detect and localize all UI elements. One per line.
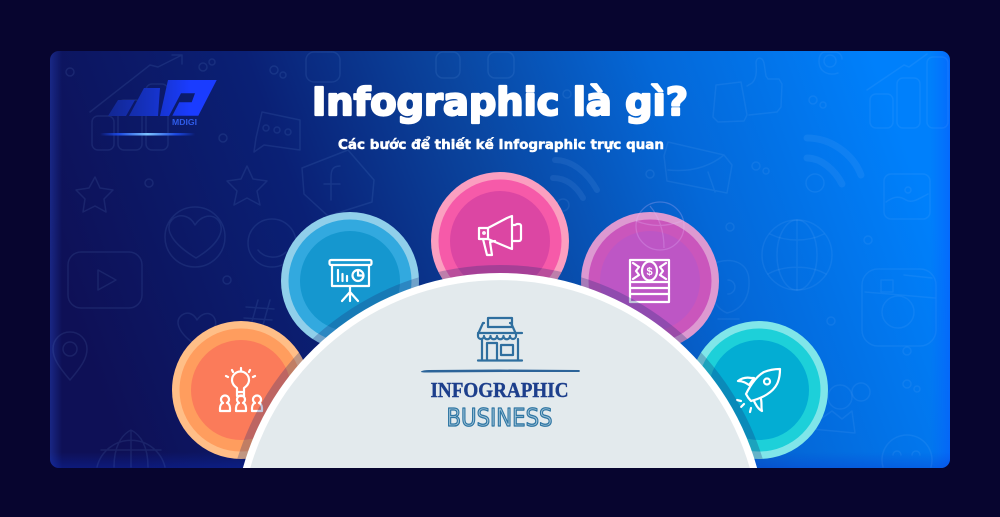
heading: BUSINESS: BUSINESS <box>446 403 552 432</box>
doodle: small bars <box>92 84 168 150</box>
shadow band cast on circles <box>235 265 765 468</box>
doodle: thumbs up <box>713 58 782 122</box>
circle: teal step <box>690 321 828 459</box>
logo mark <box>108 80 217 116</box>
circle: blue step <box>281 212 419 350</box>
doodle: picture <box>884 174 930 219</box>
icon: dollar sign: $ <box>646 266 653 278</box>
divider line <box>421 370 580 372</box>
doodle: globe <box>762 220 832 290</box>
circle: pink step <box>431 172 569 280</box>
doodle: person <box>812 383 870 433</box>
doodle: heart <box>165 207 225 267</box>
circle: orange step <box>172 321 310 459</box>
icon: storefront <box>478 318 522 360</box>
circle: purple step <box>581 202 719 350</box>
doodle: heart lower <box>178 313 216 345</box>
doodle: dribbble ball <box>636 217 684 265</box>
panel: blue gradient background <box>50 51 950 468</box>
doodle: rising arrow <box>90 55 182 112</box>
doodle: at sign <box>819 52 842 74</box>
doodle: play button <box>68 252 142 308</box>
doodle: hash <box>244 300 274 325</box>
doodle: top center icons <box>306 52 597 211</box>
doodle: smiley <box>882 435 932 467</box>
icon: rocket <box>737 369 780 412</box>
doodle: facebook <box>302 150 374 216</box>
doodle over purple <box>636 202 684 250</box>
heading: INFOGRAPHIC: INFOGRAPHIC <box>430 378 568 402</box>
subtitle: Các bước để thiết kế Infographic trực quan <box>338 136 664 153</box>
doodle icons pattern <box>53 52 948 467</box>
doodle: map pin <box>53 332 87 380</box>
logo: MDIGI <box>100 80 217 136</box>
doodle: lower left globe <box>97 430 165 467</box>
icon: presentation board <box>330 260 372 301</box>
doodle: bar chart <box>867 54 948 128</box>
doodle: chat bubble <box>254 112 300 152</box>
doodle: egg <box>715 260 750 320</box>
doodle: small bubbles <box>66 59 920 392</box>
doodle: stars <box>76 166 267 212</box>
icon: stack of money <box>630 260 669 302</box>
logo underline glow <box>100 133 195 136</box>
doodle: envelope <box>664 142 732 193</box>
logo text: MDIGI <box>172 117 197 127</box>
icon: idea and people <box>220 368 262 411</box>
doodle: wifi <box>806 138 861 192</box>
doodle: smile face <box>248 219 296 267</box>
doodle: instagram <box>862 269 936 346</box>
icon: megaphone <box>479 216 521 255</box>
infographic canvas <box>50 51 950 468</box>
title: Infographic là gì? <box>312 80 688 124</box>
central semicircle: Infographic Business <box>243 273 757 468</box>
